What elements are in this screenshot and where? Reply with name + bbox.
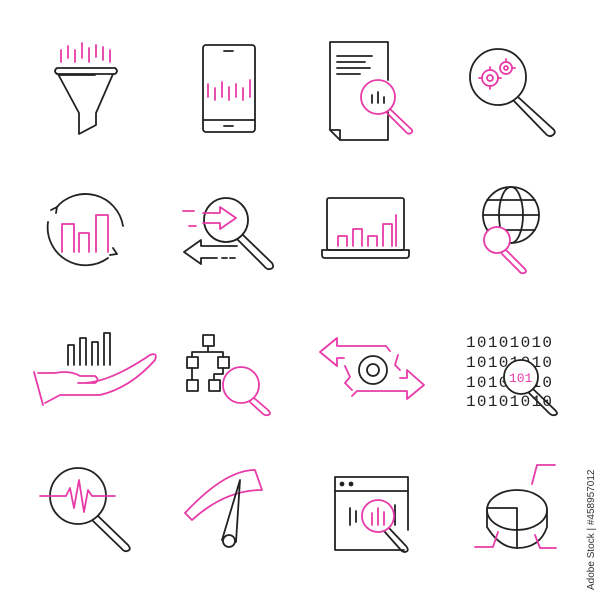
icon: gear with arrows xyxy=(320,338,424,399)
icon: hierarchy magnifier xyxy=(187,335,270,415)
icon: transfer magnifier xyxy=(183,198,273,269)
icon: binary magnifier: 10101010 xyxy=(466,374,552,392)
icon: binary magnifier: 10101010 xyxy=(466,354,552,372)
icon: globe magnifier xyxy=(483,187,539,273)
side credit text: Adobe Stock | #458957012 xyxy=(586,469,597,590)
icon: binary magnifier xyxy=(466,334,557,415)
icon: binary magnifier: 10101010 xyxy=(466,334,552,352)
icon: gear magnifier xyxy=(470,49,555,136)
icon: browser magnifier xyxy=(335,477,408,552)
icon: document magnifier xyxy=(330,42,412,140)
icon: binary magnifier: 10101010 xyxy=(466,393,552,411)
icon: funnel xyxy=(55,43,117,134)
icon: pulse magnifier xyxy=(40,468,130,551)
icon: binary magnifier: 101 xyxy=(509,371,533,386)
icon: laptop chart xyxy=(322,198,409,258)
icon: speedometer xyxy=(185,470,262,547)
icon: 3d pie chart xyxy=(475,465,556,548)
icon: smartphone chart xyxy=(203,45,255,132)
icon: refresh chart xyxy=(48,194,123,265)
icon: hand with chart xyxy=(34,333,156,405)
